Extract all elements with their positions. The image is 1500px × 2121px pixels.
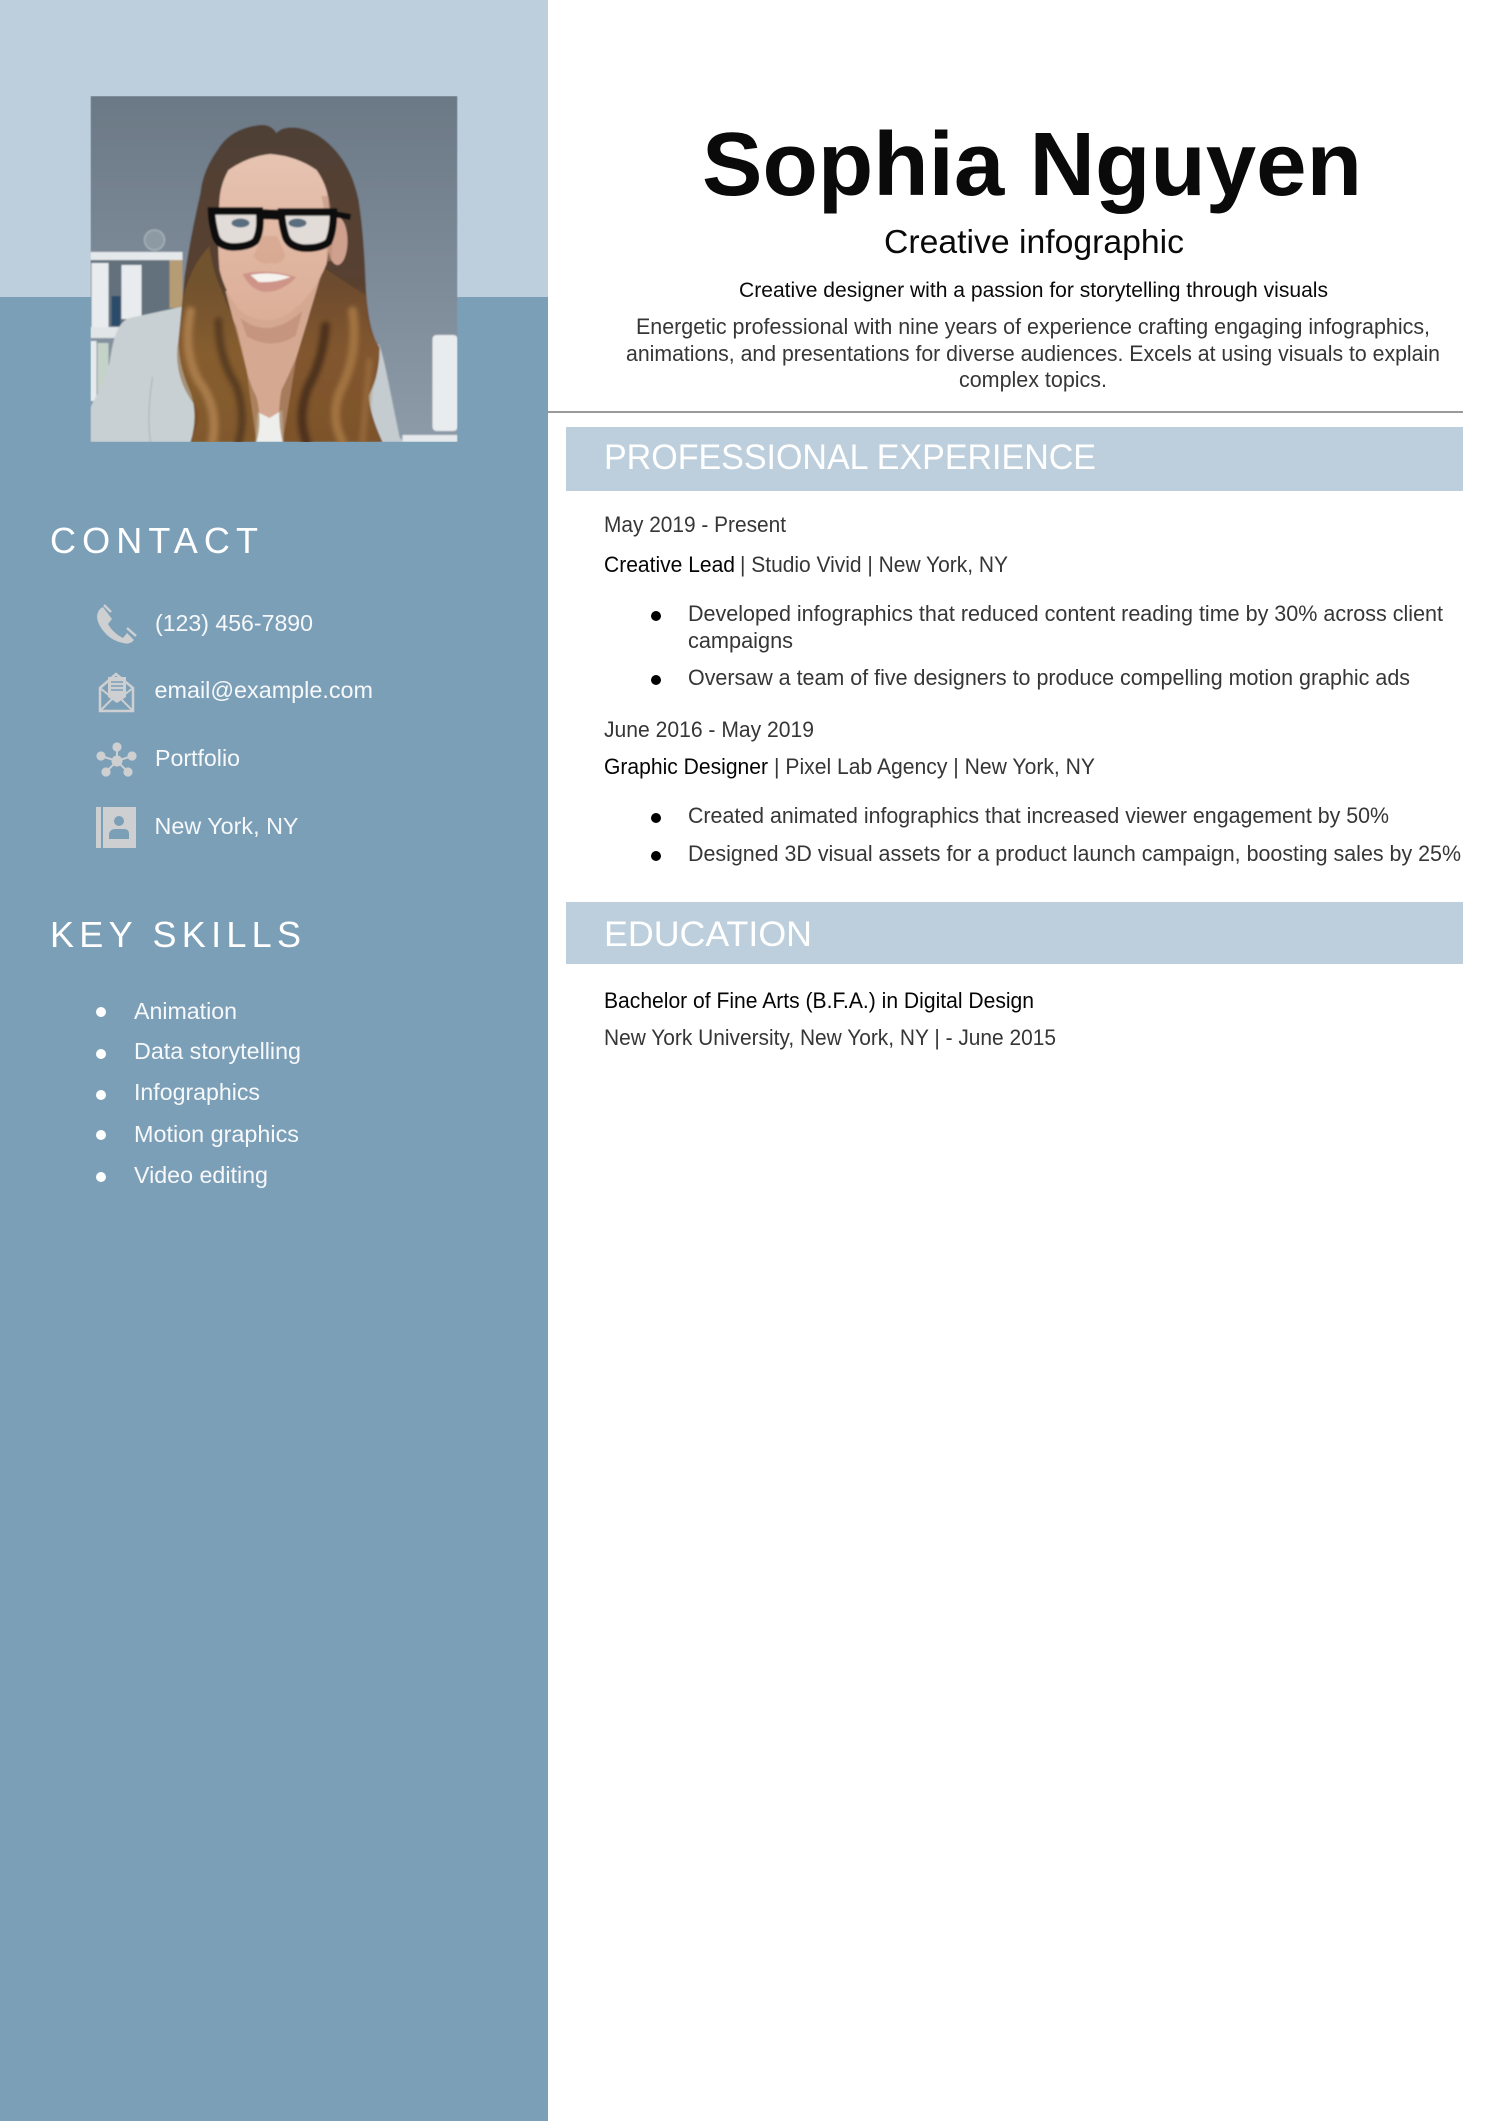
heading: contact: CONTACT <box>50 520 258 561</box>
job 2: June 2016 - May 2019 <box>604 717 814 742</box>
education entry <box>604 988 1056 1050</box>
summary paragraph: Energetic professional with nine years of experience crafting engaging infographics, <box>636 314 1430 339</box>
section header: professional experience <box>566 427 1463 491</box>
icon: address book <box>96 807 136 848</box>
skills list <box>96 998 301 1188</box>
email: email@example.com <box>154 677 373 703</box>
glasses <box>212 211 260 247</box>
education entry: New York University, New York, NY | - June 2015 <box>604 1025 1056 1050</box>
skills list: Infographics <box>134 1079 260 1105</box>
education entry: Bachelor of Fine Arts (B.F.A.) in Digital Design <box>604 988 1034 1013</box>
portfolio: Portfolio <box>155 745 240 771</box>
skills list: Animation <box>134 998 237 1024</box>
icon: phone <box>97 605 136 644</box>
job 1: Developed infographics that reduced content reading time by 30% across client <box>688 601 1444 626</box>
hair back <box>178 125 382 442</box>
job 2: | Pixel Lab Agency | New York, NY <box>774 754 1095 779</box>
mouth <box>242 272 296 292</box>
job 1 <box>604 512 1444 690</box>
neck and top <box>226 271 322 442</box>
shelf background <box>90 260 174 327</box>
job 2 <box>604 717 1461 866</box>
skills list: Data storytelling <box>134 1038 301 1064</box>
face <box>218 154 330 320</box>
job 2: Designed 3D visual assets for a product launch campaign, boosting sales by 25% <box>688 841 1461 866</box>
heading: key skills: KEY SKILLS <box>50 914 301 955</box>
job 1: campaigns <box>688 628 793 653</box>
summary paragraph: animations, and presentations for diverse audiences. Excels at using visuals to explain <box>626 341 1440 366</box>
skills list: Video editing <box>134 1162 268 1188</box>
name title: Sophia Nguyen <box>702 115 1362 215</box>
job subtitle: Creative infographic <box>884 223 1184 260</box>
summary paragraph: complex topics. <box>959 367 1107 392</box>
section header: education: EDUCATION <box>604 915 812 954</box>
summary paragraph <box>626 314 1440 392</box>
section header: professional experience: PROFESSIONAL EXPERIENCE <box>604 438 1096 477</box>
blazer <box>90 306 196 442</box>
job 1: Oversaw a team of five designers to produce compelling motion graphic ads <box>688 665 1410 690</box>
icon: envelope <box>100 674 133 711</box>
skills list: Motion graphics <box>134 1121 299 1147</box>
contact list <box>96 605 373 848</box>
profile photo <box>90 96 458 442</box>
job 1: May 2019 - Present <box>604 512 787 537</box>
location: New York, NY <box>154 813 299 839</box>
icon: network <box>97 743 136 776</box>
tagline: Creative designer with a passion for storytelling through visuals <box>739 277 1328 302</box>
sidebar panel <box>0 0 548 2121</box>
front hair lobes <box>177 246 260 442</box>
phone number: (123) 456-7890 <box>155 610 313 636</box>
section header: education <box>566 902 1463 964</box>
job 1: Creative Lead <box>604 552 735 577</box>
job 2: Created animated infographics that increased viewer engagement by 50% <box>688 803 1389 828</box>
job 2: Graphic Designer <box>604 754 768 779</box>
job 1: | Studio Vivid | New York, NY <box>740 552 1008 577</box>
nose <box>254 236 286 264</box>
